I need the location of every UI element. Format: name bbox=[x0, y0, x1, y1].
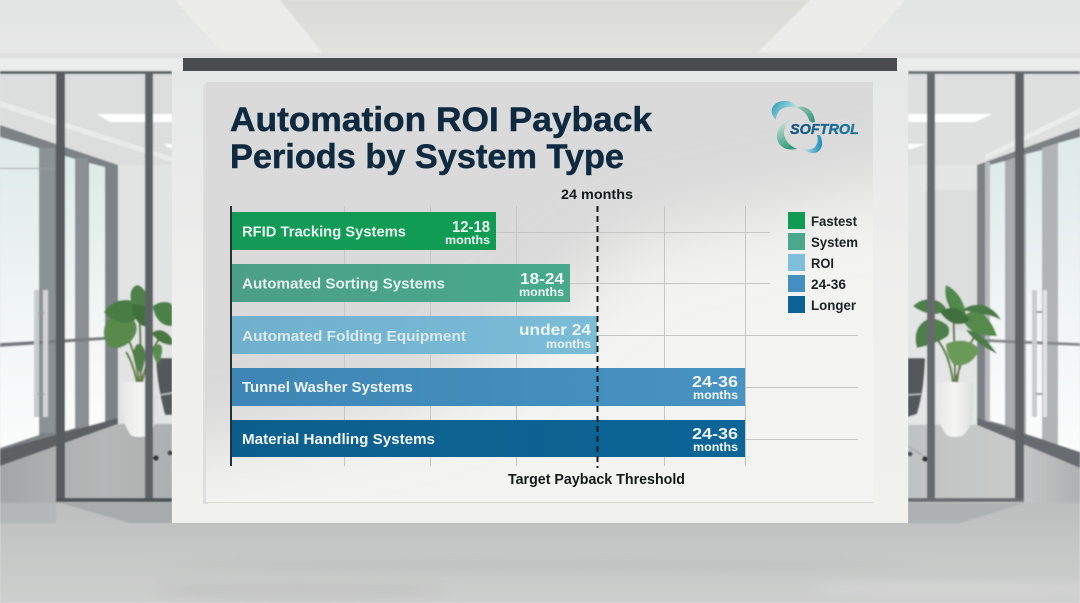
right chair bbox=[908, 358, 928, 462]
threshold dashed line bbox=[596, 206, 598, 468]
bar: Tunnel Washer Systems 24-36 months: 24-36 bbox=[692, 374, 738, 391]
dark header beam bbox=[183, 58, 897, 71]
bar: RFID Tracking Systems 12-18 months: RFID Tracking Systems bbox=[242, 224, 406, 240]
bar: Tunnel Washer Systems 24-36 months bbox=[232, 368, 745, 406]
logo swirl icon bbox=[772, 101, 822, 153]
bar: Automated Folding Equipment under 24 months: Automated Folding Equipment bbox=[242, 329, 466, 345]
title: Automation ROI Payback bbox=[230, 101, 652, 139]
pot bbox=[121, 382, 158, 437]
bar: RFID Tracking Systems 12-18 months: months bbox=[445, 235, 490, 247]
bar: RFID Tracking Systems 12-18 months bbox=[232, 212, 496, 250]
display panel bbox=[120, 0, 960, 504]
pot bbox=[936, 382, 974, 437]
bar: Automated Sorting Systems 18-24 months bbox=[232, 264, 570, 302]
bar: Material Handling Systems 24-36 months: 24-36 bbox=[692, 426, 738, 443]
bar: Automated Sorting Systems 18-24 months: 18-24 bbox=[520, 271, 564, 288]
ceiling panels bbox=[0, 0, 1080, 58]
bar: Automated Sorting Systems 18-24 months: months bbox=[519, 287, 564, 299]
legend bbox=[788, 212, 858, 313]
left door frame bbox=[0, 71, 172, 502]
threshold bottom label: Target Payback Threshold bbox=[508, 472, 685, 488]
left plant bbox=[104, 285, 172, 437]
leaves bbox=[104, 314, 137, 348]
grid lines bbox=[344, 206, 858, 466]
ceiling band bbox=[0, 58, 1080, 71]
left room bbox=[0, 71, 172, 503]
title bbox=[230, 101, 652, 176]
stems bbox=[124, 305, 164, 382]
legend item: 24-36: 24-36 bbox=[811, 277, 846, 292]
ceiling bbox=[0, 0, 1080, 74]
logo wordmark: SOFTROL bbox=[790, 122, 859, 138]
legend item: System: System bbox=[811, 235, 858, 250]
floor bbox=[0, 503, 1080, 603]
bar: Automated Sorting Systems 18-24 months: Automated Sorting Systems bbox=[242, 276, 445, 292]
bar: Automated Folding Equipment under 24 months: months bbox=[546, 339, 591, 351]
right room bbox=[908, 71, 1080, 503]
bar: RFID Tracking Systems 12-18 months: 12-18 bbox=[452, 219, 490, 236]
legend item: ROI: ROI bbox=[811, 256, 834, 271]
feature wall bbox=[172, 58, 908, 523]
bar: Tunnel Washer Systems 24-36 months: months bbox=[693, 390, 738, 402]
bar: Material Handling Systems 24-36 months bbox=[232, 420, 745, 457]
logo: Softrol bbox=[772, 101, 859, 153]
legend item: Fastest: Fastest bbox=[811, 214, 857, 229]
legend item: Longer: Longer bbox=[811, 298, 857, 313]
right plant bbox=[913, 285, 1001, 437]
bar: Material Handling Systems 24-36 months: Material Handling Systems bbox=[242, 432, 435, 448]
bar: Material Handling Systems 24-36 months: months bbox=[693, 442, 738, 454]
bar: Automated Folding Equipment under 24 months bbox=[232, 316, 597, 354]
right door frame bbox=[908, 71, 1080, 502]
title: Periods by System Type bbox=[230, 138, 624, 176]
left chair bbox=[153, 358, 172, 461]
bar: Automated Folding Equipment under 24 months: under 24 bbox=[519, 322, 591, 339]
bar: Tunnel Washer Systems 24-36 months: Tunnel Washer Systems bbox=[242, 380, 413, 396]
stems bbox=[936, 310, 978, 382]
threshold top label: 24 months bbox=[561, 186, 633, 202]
y axis bbox=[230, 206, 232, 466]
leaves bbox=[945, 285, 966, 324]
chart bbox=[230, 186, 858, 488]
